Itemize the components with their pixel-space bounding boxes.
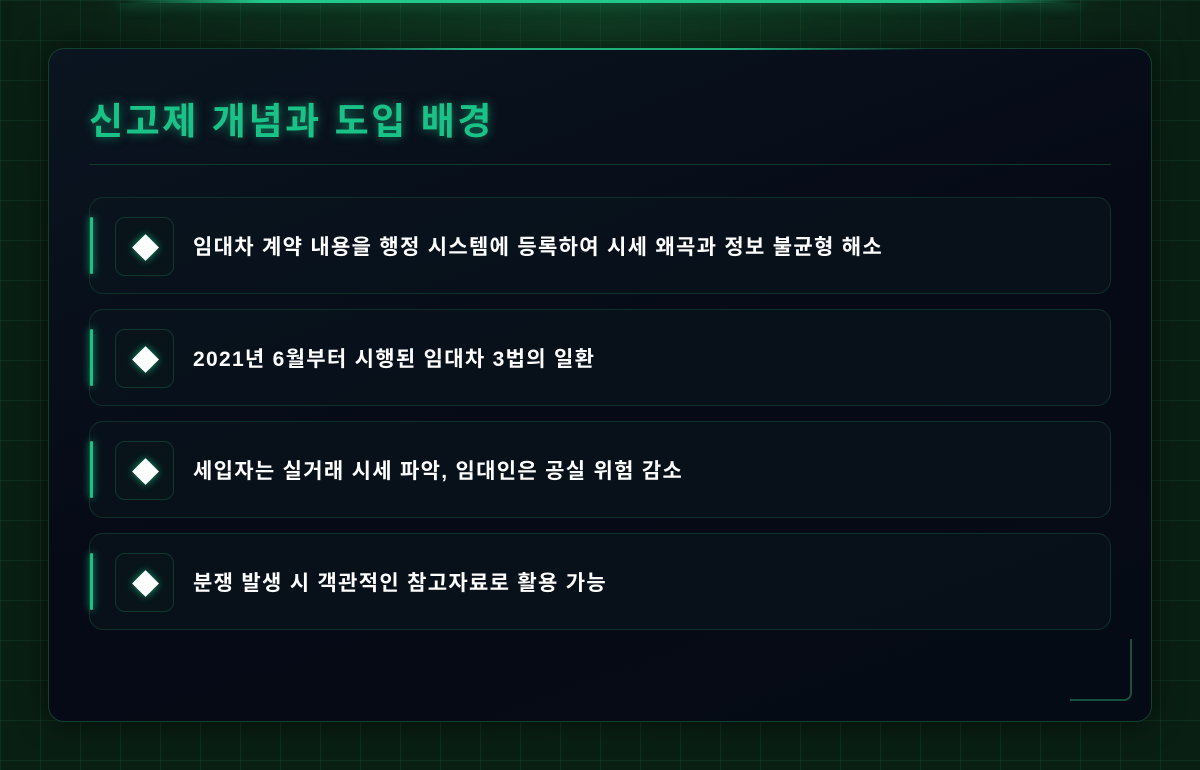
item 4 xyxy=(89,533,1111,630)
icon: diamond xyxy=(115,441,174,500)
text 2: 2021년 6월부터 시행된 임대차 3법의 일환 xyxy=(193,348,595,371)
icon: diamond xyxy=(115,217,174,276)
corner bracket decoration xyxy=(1070,639,1132,701)
item 3 xyxy=(89,421,1111,518)
title: 신고제 개념과 도입 배경 xyxy=(89,101,494,142)
text 3: 세입자는 실거래 시세 파악, 임대인은 공실 위험 감소 xyxy=(193,460,683,483)
item 2 xyxy=(89,309,1111,406)
text 1: 임대차 계약 내용을 행정 시스템에 등록하여 시세 왜곡과 정보 불균형 해소 xyxy=(193,236,883,259)
item 1 xyxy=(89,197,1111,294)
icon: diamond xyxy=(115,553,174,612)
top glow line xyxy=(120,0,1080,3)
text 4: 분쟁 발생 시 객관적인 참고자료로 활용 가능 xyxy=(193,572,607,595)
icon: diamond xyxy=(115,329,174,388)
